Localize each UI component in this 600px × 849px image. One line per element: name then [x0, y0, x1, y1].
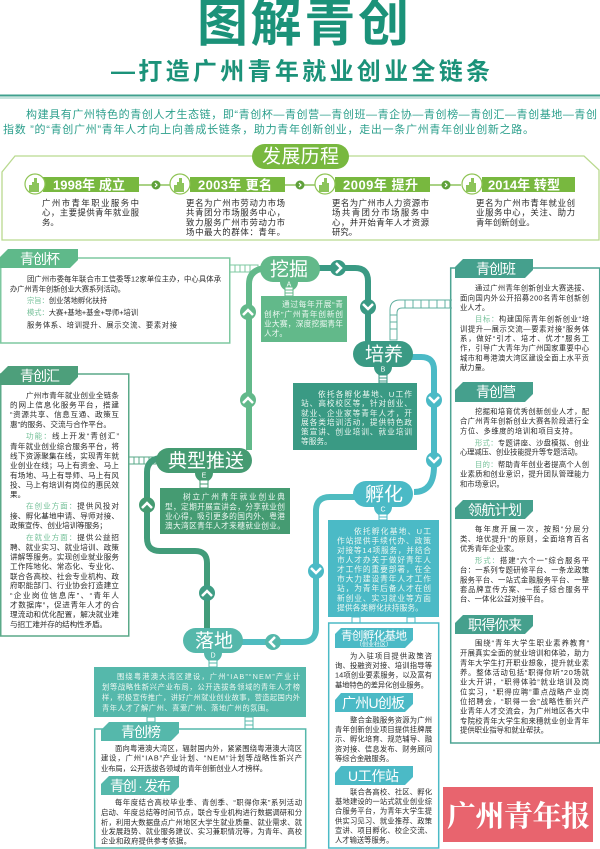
- text box: dianxing tuisong: 树立广州青年就业创业典: [183, 492, 285, 502]
- panel: right column programmes: 台：一系列专题研修平台、一条龙政策: [460, 566, 590, 575]
- panel: qingchuang hui: 联合各高校、社会专业机构、政: [10, 571, 119, 581]
- text box: fuhua: 作站提供手续代办、政策: [337, 536, 431, 546]
- tag: qingchuang fabu: [101, 776, 179, 795]
- text box: luodi: 划等战略性新兴产业布局，公开选拔各领域的青年人才榜: [102, 683, 300, 692]
- node: luodi D: D: [210, 652, 216, 660]
- panel: qingchuang bang and fabu: 业布局，公开选拔各领域的青年创新创业人才榜样。: [101, 764, 267, 773]
- panel: qingchuang hui: 在创业方面：提供风投对: [26, 500, 119, 510]
- panel: right column programmes: 心理减压、创业技能提升等专题活动。: [460, 448, 582, 457]
- path: fuhua to luodi: [240, 497, 355, 650]
- text box: peiyang: [293, 383, 417, 450]
- intro text: [3, 107, 597, 136]
- text box: peiyang: 就业、企业家等青年人才，开: [301, 408, 412, 418]
- panel: incubator bases: [329, 617, 439, 848]
- panel: right column programmes: 业青年人才交流会，为广州地区各大中: [460, 707, 589, 716]
- path: peiyang to fuhua: [410, 357, 442, 492]
- text box: fuhua: 站，为青年后备人才在创: [337, 583, 431, 593]
- node: dianxing tuisong E: E: [202, 472, 207, 480]
- panel: right column programmes: 优秀青年企业家。: [460, 544, 518, 553]
- text box: fuhua: 市大力建设青年人才工作: [337, 574, 431, 584]
- milestone 2003: [170, 174, 304, 237]
- panel: qingchuang bei: 宗旨：创业落地孵化扶持: [27, 296, 107, 305]
- node: luodi D: [183, 628, 243, 667]
- panel: qingchuang hui: 青年就业创业综合服务平台，将: [10, 441, 119, 451]
- milestone 2003: 场中最大的群体：青年。: [186, 227, 285, 237]
- panel: incubator bases: 为入驻项目提供政策咨: [350, 652, 432, 661]
- panel: incubator bases: 人才输送等服务。: [335, 836, 393, 845]
- tag: U station: U工作站: [348, 768, 399, 784]
- text box: peiyang: 等服务。: [301, 436, 332, 446]
- panel: qingchuang hui: 工作阵地化、常态化、专业化、: [10, 561, 119, 571]
- panel: right column programmes: 业大开讲，“职得体验”就业培训及岗: [460, 678, 589, 687]
- panel: qingchuang bei: [0, 249, 230, 343]
- panel: qingchuang hui: “企业岗位信息库”、“青年人: [10, 590, 119, 600]
- arrow: [426, 452, 442, 468]
- node: dianxing tuisong E: 典型推送: [168, 450, 244, 472]
- panel: incubator bases: 基地特色的差异化创业服务。: [335, 681, 428, 690]
- panel: right column programmes: 形式：专题讲座、沙盘模拟、创业: [475, 438, 589, 447]
- tag: U board: 广州U创板: [342, 695, 405, 711]
- milestone 2009: 2009年 提升: [343, 178, 418, 192]
- panel: qingchuang bei: 服务体系、培训提升、展示交流、要素对接: [27, 321, 178, 330]
- text box: luodi: [94, 667, 306, 717]
- panel: incubator bases: 示、孵化培育、规范辅导、融: [335, 735, 433, 744]
- node: peiyang B: B: [381, 366, 386, 374]
- panel: qingchuang hui: 有场地、马上有导师、马上有风: [10, 470, 119, 480]
- panel: qingchuang hui: “资源共享、信息互通、政策互: [10, 409, 119, 419]
- text box: wajue: 业大赛，深度挖掘青年: [264, 318, 343, 328]
- node: fuhua C: [353, 481, 413, 520]
- arrow: [308, 563, 324, 579]
- ladder connectors: [129, 265, 450, 464]
- panel: right column programmes: 系，做好“引才、培才、优才”服务工: [460, 334, 589, 343]
- panel: right column programmes: 套品牌宣传方案、一揽子综合服务平: [460, 585, 589, 594]
- subtitle: —打造广州青年就业创业全链条: [111, 58, 490, 86]
- panel: qingchuang hui: 果。: [10, 490, 25, 499]
- panel: qingchuang bang and fabu: [95, 717, 306, 848]
- panel: qingchuang hui: 与招工难并存的结构性矛盾。: [10, 619, 107, 629]
- text box: peiyang: 站、高校校区等，针对创业、: [301, 398, 412, 408]
- text box: fuhua: 才工作的重要部署，在全: [337, 564, 431, 574]
- tag: zhide nilai: 职得你来: [468, 617, 522, 633]
- text box: luodi: 青年人才了解广州、喜爱广州、落地广州的氛围。: [102, 704, 273, 713]
- milestone 2003: 共青团分市场服务中心，: [186, 207, 285, 217]
- tag: U board: [335, 693, 413, 712]
- panel: qingchuang bang and fabu: 面向粤港澳大湾区，辐射国内外，紧紧围绕粤港澳大湾区: [115, 744, 302, 753]
- node: peiyang B: [353, 341, 413, 383]
- text box: wajue: 通过每年开展“青: [282, 299, 343, 309]
- panel: qingchuang hui: 讲解等服务。实现创业就业服务: [10, 552, 119, 562]
- panel: qingchuang hui: 业创业在线；马上有资金、马上: [10, 460, 119, 470]
- panel: incubator bases: 整合金融服务资源为广州: [350, 716, 432, 725]
- tag: qingchuang fabu: 青创 · 发布: [110, 778, 171, 794]
- panel: qingchuang hui: 接、孵化基地申请、导师对接、: [10, 510, 119, 520]
- panel: right column programmes: 专院校青年大学生和来穗就业创业青年: [460, 716, 589, 725]
- heading: development history: 发展历程: [262, 146, 339, 168]
- path: wajue to peiyang: [318, 260, 376, 343]
- panel: qingchuang hui: 线下资源聚集在线，实现青年就: [10, 450, 119, 460]
- milestone 2009: 场共青团分市场服务中: [332, 207, 429, 217]
- arrow: [330, 260, 346, 276]
- node: fuhua C: C: [380, 506, 386, 514]
- milestone 2014: [462, 174, 575, 227]
- panel: right column programmes: 目的：帮助青年创业者提高个人创: [475, 460, 589, 469]
- tag: qingchuang bei: [0, 249, 78, 268]
- panel: qingchuang bang and fabu: 业发展趋势、就业服务建议、实习兼职情况等，为青年、高校: [101, 827, 303, 836]
- path: luodi to dianxing tuisong: [139, 458, 215, 630]
- panel: right column programmes: 台、一体化公益对接平台。: [460, 595, 548, 604]
- panel: qingchuang bang and fabu: 析，利用大数据盘点广州地区大学生就业质量、就业需求、就: [101, 818, 303, 827]
- text box: fuhua: 市人才办关于做好青年人: [337, 554, 431, 564]
- panel: incubator bases: 14项创业要素服务，以及富有: [335, 671, 432, 680]
- panel: qingchuang bang and fabu: 每年度结合高校毕业季、青创季、“职得你来”系列活动: [115, 798, 302, 807]
- panel: incubator bases: 联合各高校、社区、孵化: [350, 787, 433, 796]
- milestone 1998: 心，主要提供青年就业服: [42, 207, 140, 217]
- text box: peiyang: 依托各孵化基地、U工作: [318, 389, 412, 399]
- panel: right column programmes: 城市和粤港澳大湾区建设全面上水平贡: [460, 353, 589, 362]
- panel: right column programmes: 作，引导广大青年为广州国家重要中心: [460, 344, 590, 353]
- tag: qingchuang bang: 青创榜: [121, 724, 161, 740]
- text box: peiyang: 展各类培训活动，提供特色政: [301, 417, 412, 427]
- text box: fuhua: 提供各类孵化扶持服务。: [337, 602, 423, 612]
- milestone 2003: 更名为广州市劳动力市场: [186, 198, 285, 208]
- tag: zhide nilai: [455, 615, 533, 634]
- panel: right column programmes: 合广州青年创新创业大赛各阶段进行全: [460, 417, 590, 426]
- tag: qingchuang hui: 青创汇: [20, 368, 60, 384]
- milestone 1998: 广州市青年职业服务中: [42, 198, 139, 208]
- panel: right column programmes: 位实习，“职得应聘”重点战略产业岗: [460, 687, 589, 696]
- arrow: [426, 392, 442, 408]
- milestone 1998: [25, 174, 160, 227]
- panel: qingchuang hui: 聘、就业实习、就业培训、政策: [10, 542, 119, 552]
- tag: qingchuang ban: [455, 259, 533, 278]
- panel: qingchuang hui: 广州市青年就业创业全链条: [26, 390, 119, 400]
- panel: right column programmes: 每年度开展一次，按照“分层分: [475, 525, 589, 534]
- text box: fuhua: 对接等14项服务，并结合: [337, 545, 431, 555]
- text box: fuhua: 依托孵化基地、U工: [354, 526, 431, 536]
- panel: right column programmes: 和市场意识。: [460, 479, 504, 488]
- panel: incubator bases: 基地建设的一站式就业创业综: [335, 797, 433, 806]
- panel: qingchuang hui: 府职能部门、行业协会打造建立: [10, 580, 119, 590]
- panel: incubator bases: 资对接、信息发布、财务顾问: [335, 744, 432, 753]
- arrow: [360, 299, 376, 315]
- tag: incubator base: 青创孵化基地: [341, 628, 408, 642]
- tag: qingchuang ban: 青创班: [476, 261, 516, 277]
- panel: qingchuang bang and fabu: 企业和政府提供参考依据。: [101, 837, 191, 846]
- panel: right column programmes: 形式：搭建“六个一”综合服务平: [475, 556, 589, 565]
- node: peiyang B: 培养: [365, 344, 403, 366]
- panel: right column programmes: 养。整体活动包括“职得你听”20场就: [460, 668, 590, 677]
- text box: dianxing tuisong: [160, 488, 290, 534]
- arrow: [240, 304, 256, 320]
- panel: qingchuang hui: 功能：线上开发“青创汇”: [26, 430, 119, 440]
- intro text: 指数 ”的“青创广州”青年人才向上向善成长链条，助力青年创新创业，走出一条广州青年创业创新之路。: [3, 122, 534, 136]
- panel: right column programmes: 面向国内外公开招募200名青年创新创: [460, 293, 589, 302]
- panel: qingchuang hui: 在就业方面：提供公益招: [26, 532, 119, 542]
- panel: right column programmes: 献力量。: [460, 363, 489, 372]
- node: wajue A: [260, 256, 320, 296]
- milestone 2014: 业服务中心，关注、助力: [476, 207, 575, 217]
- text box: fuhua: [328, 520, 439, 617]
- arrow: [139, 497, 155, 513]
- tag: qingchuang bei: 青创杯: [20, 251, 60, 267]
- text box: wajue: [261, 296, 347, 342]
- panel: qingchuang hui: 的网上信息化服务平台，搭建: [10, 400, 119, 410]
- intro text: 构建具有广州特色的青创人才生态链，即“青创杯—青创营—青创班—青企协—青创榜—青创汇—青创基地—青创: [26, 107, 597, 121]
- panel: right column programmes: 位招聘会，“职得一会”战略性新兴产: [460, 697, 589, 706]
- panel: right column programmes: [450, 259, 600, 743]
- tag: qingchuang ying: 青创营: [476, 384, 516, 400]
- panel: right column programmes: 青年大学生打开职业想象，提升就业素: [460, 658, 589, 667]
- panel: qingchuang bei: 办广州青年创新创业大赛系列活动。: [10, 284, 125, 293]
- panel: qingchuang hui: 理流动和优化配置，解决就业难: [10, 609, 119, 619]
- panel: development history: [2, 144, 599, 240]
- tag: qingchuang ying: [455, 382, 533, 402]
- milestone 2009: 研究。: [332, 227, 357, 237]
- text box: dianxing tuisong: 澳大湾区青年人才来穗就业创业。: [165, 520, 285, 530]
- arrow: [240, 392, 256, 408]
- panel: qingchuang hui: 政策宣传、创业培训等服务；: [10, 520, 107, 530]
- milestone 2014: 更名为广州市青年就业创: [476, 198, 575, 208]
- panel: qingchuang bei: 模式：大赛+基地+基金+导师+培训: [27, 308, 138, 317]
- panel: qingchuang bang and fabu: 建设，广州“IAB”产业计划、“NEM”计划等战略性新兴产: [101, 754, 302, 763]
- panel: qingchuang hui: [0, 366, 129, 636]
- panel: right column programmes: 提供职业指导和就业帮扶。: [460, 726, 548, 735]
- panel: incubator bases: 青年创新创业项目提供挂牌展: [335, 725, 432, 734]
- tag: U station: [335, 766, 413, 785]
- panel: incubator bases: 供实习见习、就业推荐、政策: [335, 816, 433, 825]
- text box: wajue: 人才。: [264, 328, 287, 338]
- panel: right column programmes: 挖掘和培育优秀创新创业人才，配: [475, 407, 590, 416]
- node: fuhua C: 孵化: [365, 484, 403, 506]
- panel: right column programmes: 目标：构建国际青年创新创业“培: [475, 315, 589, 324]
- arrow: [265, 634, 281, 650]
- text box: wajue: 创杯”广州青年创新创: [264, 309, 343, 319]
- node: luodi D: 落地: [195, 630, 233, 652]
- panel: right column programmes: 类、培优提升”的原则，全面培育百名: [460, 535, 589, 544]
- text box: dianxing tuisong: 型，定期开展宣讲会，分享就业创: [165, 502, 285, 512]
- text box: fuhua: 新创业、实习就业等方面: [337, 593, 431, 603]
- panel: qingchuang hui: 惠”的服务、交流与合作平台。: [10, 419, 111, 429]
- node: wajue A: A: [287, 282, 292, 288]
- panel: qingchuang hui: 投、马上有培训有岗位的惠民效: [10, 480, 119, 490]
- text box: luodi: 样，积极宣传推广，讲好广州就业创业故事，营造起国内外: [102, 693, 301, 702]
- logo: Guangzhou Youth Daily: [443, 787, 593, 842]
- panel: qingchuang bang and fabu: 启动、年度总结等时间节点，联合专业机构进行数据调研和分: [101, 808, 302, 817]
- panel: right column programmes: 围绕“青年大学生职业素养教育”: [475, 638, 590, 647]
- tag: incubator base: [335, 628, 413, 648]
- panel: right column programmes: 开展真实全面的就业培训和体验，助力: [460, 648, 589, 657]
- panel: right column programmes: 通过广州青年创新创业大赛选拔、: [475, 284, 589, 293]
- milestone 2009: 心，并开始青年人才资源: [332, 217, 430, 227]
- panel: right column programmes: 服务平台、一站式金融服务平台、一整: [460, 575, 590, 584]
- heading: development history: [252, 144, 349, 169]
- milestone 1998: 务。: [42, 217, 59, 227]
- panel: qingchuang bei: 团广州市委每年联合市工信委等12家单位主办，中心具体承: [27, 275, 222, 284]
- panel: incubator bases: 等综合金融服务。: [335, 754, 393, 763]
- text box: luodi: 围绕粤港澳大湾区建设，广州“IAB”“NEM”产业计: [117, 672, 300, 681]
- panel: right column programmes: 方位、多维度的培训和项目支持。: [460, 426, 577, 435]
- tag: incubator base: （创业社区）: [356, 640, 392, 648]
- milestone 2003: 2003年 更名: [198, 178, 272, 192]
- panel: incubator bases: 合服务平台，为青年大学生提: [335, 807, 433, 816]
- node: wajue A: 挖掘: [270, 258, 308, 280]
- panel: right column programmes: 业素质和创业意识，提升团队管理能力: [460, 470, 589, 479]
- panel: right column programmes: 业人才。: [460, 303, 489, 312]
- tag: qingchuang bang: [101, 722, 179, 741]
- milestone 2009: [315, 174, 450, 237]
- milestone 1998: 1998年 成立: [53, 178, 125, 192]
- path: tuijian to wajue: [240, 268, 265, 450]
- tag: qingchuang hui: [0, 366, 78, 385]
- text box: dianxing tuisong: 业心得，吸引更多的国内外、粤港: [165, 511, 285, 521]
- panel: incubator bases: 宣讲、项目孵化、校企交流、: [335, 826, 432, 835]
- tag: linghang plan: [455, 500, 533, 519]
- logo: Guangzhou Youth Daily: 广州青年报: [447, 799, 590, 833]
- milestone 2003: 致力服务广州市劳动力市: [186, 217, 285, 227]
- milestone 2014: 青年创新创业。: [476, 217, 535, 227]
- node: dianxing tuisong E: [156, 448, 252, 488]
- text box: peiyang: 策宣讲、创业培训、就业培训: [301, 426, 412, 436]
- panel: right column programmes: 训提升—展示交流—要素对接”服务体: [460, 324, 590, 333]
- tag: linghang plan: 领航计划: [468, 502, 522, 518]
- arrow: [199, 585, 215, 601]
- milestone 2009: 更名为广州市人力资源市: [332, 198, 429, 208]
- panel: qingchuang hui: 才数据库”，促进青年人才的合: [10, 600, 119, 610]
- milestone 2014: 2014年 转型: [488, 178, 560, 192]
- panel: incubator bases: 询、投融资对接、培训指导等: [335, 661, 432, 670]
